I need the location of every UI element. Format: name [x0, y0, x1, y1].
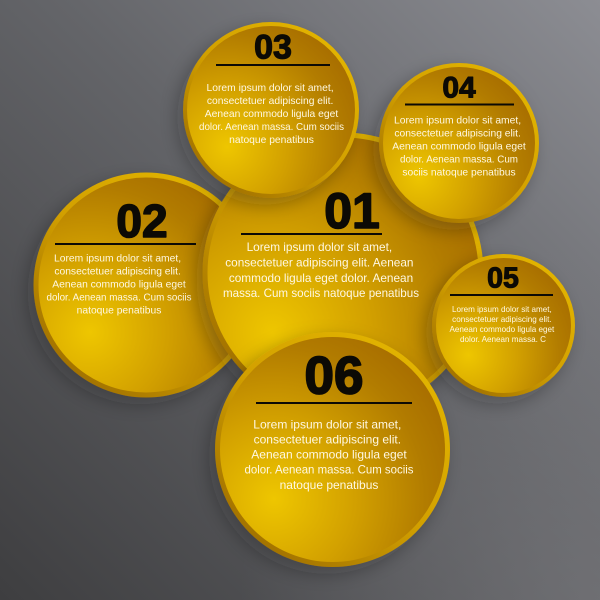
panel: circle 02: natoque penatibus: [77, 306, 161, 316]
panel: circle 04: Lorem ipsum dolor sit amet,: [394, 116, 521, 126]
panel: circle 01: 01: [324, 183, 380, 239]
panel: circle 01: massa. Cum sociis natoque penatibus: [223, 286, 419, 300]
panel: circle 04: 04: [442, 72, 476, 104]
panel: circle 04: consectetuer adipiscing elit.: [394, 128, 521, 140]
panel: circle 05: [432, 254, 575, 397]
panel: circle 04: dolor. Aenean massa. Cum: [400, 154, 518, 166]
panel: circle 02: consectetuer adipiscing elit.: [54, 266, 181, 278]
panel: circle 02: 02: [116, 195, 168, 247]
panel: circle 01: Lorem ipsum dolor sit amet,: [247, 240, 392, 254]
panel: circle 03: [183, 22, 359, 198]
panel: circle 05: consectetuer adipiscing elit.: [452, 315, 552, 324]
panel: circle 06: Aenean commodo ligula eget: [251, 448, 407, 462]
panel: circle 01: consectetuer adipiscing elit. Aenean: [225, 256, 413, 270]
panel: circle 03: Aenean commodo ligula eget: [205, 109, 338, 120]
panel: circle 01: [202, 132, 484, 414]
panel: circle 04: Aenean commodo ligula eget: [392, 142, 526, 152]
panel: circle 05: Lorem ipsum dolor sit amet,: [452, 305, 552, 314]
panel: circle 03: natoque penatibus: [229, 135, 314, 146]
panel: circle 02: [34, 172, 258, 398]
panel: circle 06: Lorem ipsum dolor sit amet,: [253, 418, 401, 432]
panel: circle 03: Lorem ipsum dolor sit amet,: [207, 83, 334, 94]
panel: circle 04: sociis natoque penatibus: [402, 168, 516, 178]
panel: circle 03: dolor. Aenean massa. Cum sociis: [199, 122, 344, 133]
panel: circle 06: 06: [305, 346, 363, 406]
panel: circle 06: dolor. Aenean massa. Cum sociis: [244, 462, 414, 476]
panel: circle 06: consectetuer adipiscing elit.: [254, 432, 401, 446]
panel: circle 02: Aenean commodo ligula eget: [52, 280, 186, 290]
panel: circle 03: consectetuer adipiscing elit.: [207, 96, 333, 107]
panel: circle 05: dolor. Aenean massa. C: [460, 335, 546, 344]
panel: circle 04: [379, 63, 539, 223]
panel: circle 05: Aenean commodo ligula eget: [449, 325, 555, 334]
panel: circle 05: 05: [487, 262, 519, 294]
panel: circle 06: [215, 332, 450, 567]
panel: circle 02: dolor. Aenean massa. Cum sociis: [46, 292, 192, 304]
panel: circle 01: commodo ligula eget dolor. Aenean: [229, 271, 413, 285]
panel: circle 06: natoque penatibus: [280, 478, 378, 492]
panel: circle 02: Lorem ipsum dolor sit amet,: [54, 254, 181, 264]
panel: circle 03: 03: [254, 28, 292, 66]
